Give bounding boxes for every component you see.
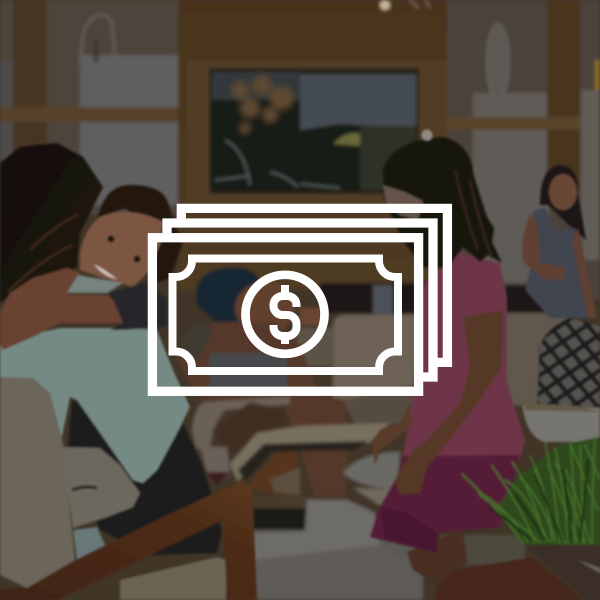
plant vase <box>522 543 600 600</box>
front banknote <box>152 238 419 391</box>
hugging girl arm and sleeves <box>0 268 167 350</box>
girl legs <box>407 528 467 583</box>
girl in pink dress <box>370 130 525 583</box>
dark skirt of mother <box>68 400 222 555</box>
right sofa and floor <box>440 285 570 565</box>
background woman <box>175 267 348 497</box>
centre wooden panel <box>178 0 448 290</box>
girl face <box>383 185 423 220</box>
low dark box <box>253 497 313 533</box>
television <box>209 68 419 194</box>
right wall clock <box>487 24 509 100</box>
mother's shirt <box>0 328 190 483</box>
blue pants below cushion <box>73 527 105 560</box>
left wall clock <box>80 15 116 96</box>
skirt ruffle fold <box>380 507 437 553</box>
right wall posts and beam <box>447 0 600 260</box>
fireplace <box>320 283 430 313</box>
grass plant <box>462 436 600 545</box>
girl hair curls <box>455 170 492 258</box>
mother's hair <box>0 143 103 303</box>
woman in background right <box>522 165 597 318</box>
armchair wooden arm <box>0 480 257 600</box>
hair streaks <box>8 215 78 292</box>
hugging girl hair <box>98 185 182 283</box>
background sofa <box>297 315 425 425</box>
armchair cushion <box>0 377 75 588</box>
white bowl <box>522 403 600 442</box>
white coffee table <box>253 452 423 600</box>
wood side table <box>435 557 583 600</box>
left wall <box>0 0 180 215</box>
chrome chair <box>192 396 390 497</box>
girl far arm and hand <box>372 403 412 465</box>
girl skirt <box>370 455 520 553</box>
hair flower <box>422 130 432 140</box>
patterned cushion <box>538 318 600 407</box>
dollar sign <box>274 285 296 344</box>
wine glass <box>200 447 230 486</box>
money icon <box>152 208 447 391</box>
armchair side pillow <box>63 447 140 528</box>
left wall wood posts and beam <box>0 0 178 190</box>
middle banknote <box>167 223 433 377</box>
background cushion pattern <box>373 285 393 315</box>
photo subjects <box>0 130 600 600</box>
ceiling light <box>380 0 430 10</box>
girl hair <box>383 137 502 268</box>
banknote inner border <box>172 258 398 371</box>
girl arm <box>395 310 503 495</box>
back banknote <box>181 208 447 362</box>
right wall <box>447 0 600 300</box>
dollar circle <box>246 275 324 354</box>
white seat <box>120 557 226 600</box>
girl dress <box>400 253 525 470</box>
hugging girl face <box>80 212 163 287</box>
